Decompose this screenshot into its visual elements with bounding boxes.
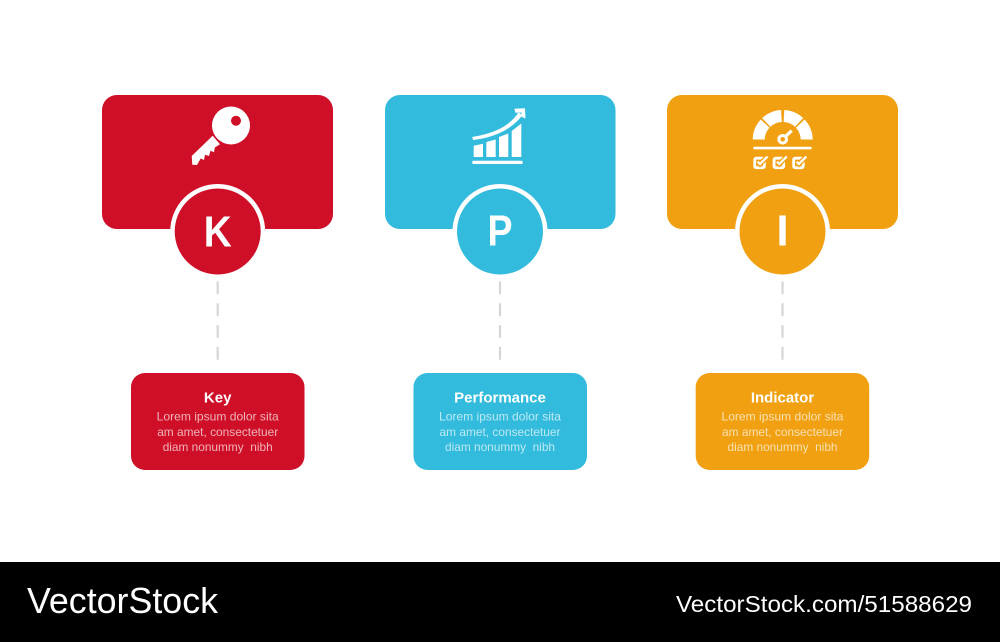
- I header card: [667, 95, 898, 229]
- icon: key: [192, 106, 250, 165]
- P circle badge: P: [488, 208, 512, 256]
- footer image id: VectorStock.com/51588629: [676, 591, 972, 617]
- panel: I column: [667, 95, 898, 470]
- footer watermark bar: [0, 562, 1000, 642]
- P circle badge: [452, 184, 548, 279]
- P text card: am amet, consectetuer: [440, 425, 560, 439]
- K circle badge: [170, 184, 265, 279]
- P text card: Performance: [454, 390, 546, 406]
- K text card: am amet, consectetuer: [157, 425, 278, 439]
- K text card: diam nonummy nibh: [163, 440, 273, 454]
- P text card: Lorem ipsum dolor sita: [439, 410, 561, 424]
- I text card: am amet, consectetuer: [722, 425, 843, 439]
- footer brand name: VectorStock: [27, 580, 219, 621]
- I text card: Lorem ipsum dolor sita: [722, 410, 844, 424]
- K text card: Lorem ipsum dolor sita: [157, 410, 279, 424]
- K dashed connector: [217, 282, 219, 361]
- P header card: [385, 95, 616, 229]
- K circle badge: K: [204, 208, 232, 256]
- icon: growth chart: [472, 108, 526, 164]
- K text card: [131, 373, 304, 470]
- I circle badge: [735, 184, 830, 279]
- K text card: Key: [204, 390, 232, 406]
- P text card: diam nonummy nibh: [445, 440, 555, 454]
- P text card: [414, 373, 587, 470]
- P dashed connector: [499, 282, 501, 361]
- I circle badge: I: [776, 208, 789, 256]
- panel: P column: [385, 95, 616, 470]
- I dashed connector: [781, 282, 784, 361]
- panel: K column: [102, 95, 333, 470]
- icon: gauge with checkboxes: [753, 110, 813, 168]
- I text card: Indicator: [751, 390, 814, 406]
- K header card: [102, 95, 333, 229]
- I text card: diam nonummy nibh: [728, 440, 838, 454]
- I text card: [696, 373, 869, 470]
